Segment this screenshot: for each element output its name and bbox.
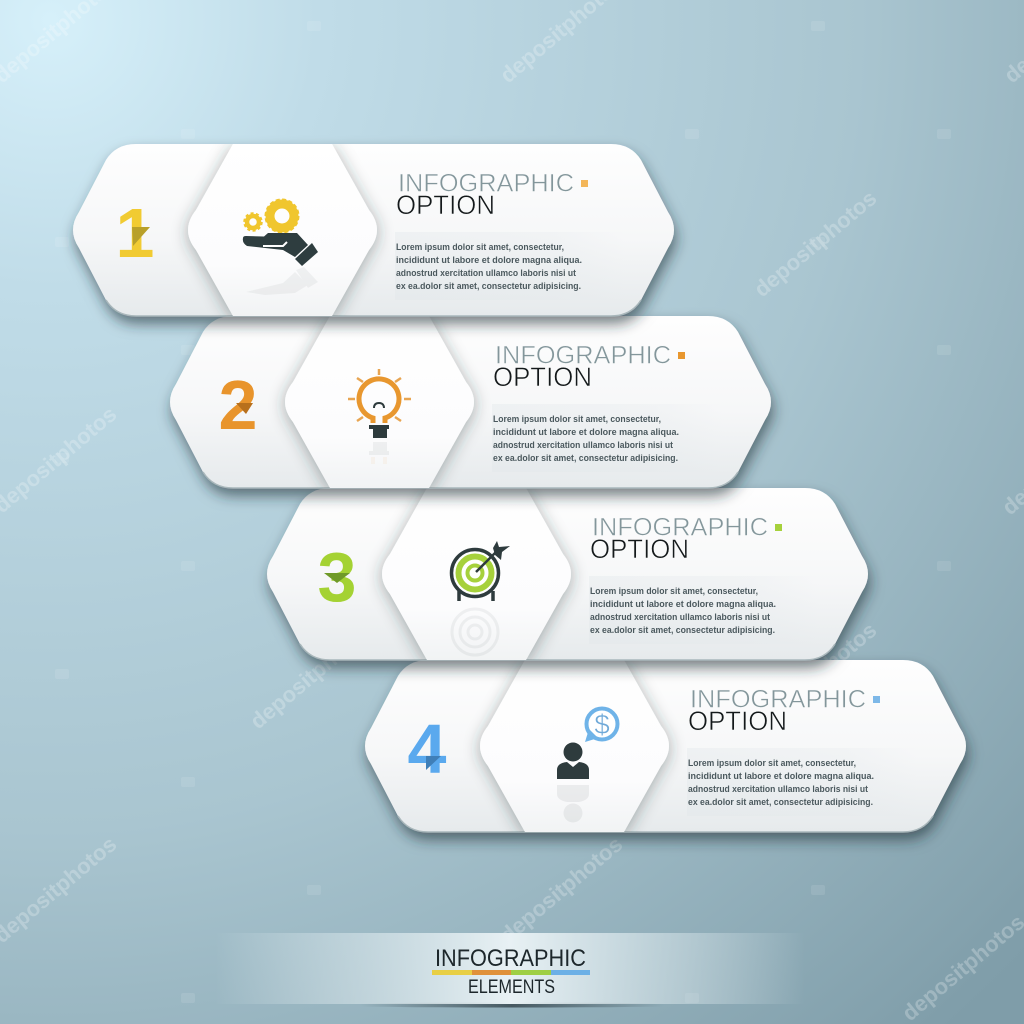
watermarks: depositphotos [749, 617, 881, 734]
marker [581, 180, 588, 187]
text block: adnostrud xercitation ullamco laboris nisi ut [493, 440, 673, 450]
panel: option 4 [365, 660, 966, 832]
text block: incididunt ut labore et dolore magna aliqua. [590, 599, 776, 609]
text block: adnostrud xercitation ullamco laboris nisi ut [590, 612, 770, 622]
colour bar [432, 970, 590, 975]
heading: INFOGRAPHIC [690, 686, 866, 714]
icon: light bulb [348, 369, 411, 464]
text block [688, 758, 874, 807]
icon: person with dollar speech bubble [557, 708, 618, 822]
text block [396, 242, 582, 291]
panel: option 3 [267, 488, 868, 660]
text block: ex ea.dolor sit amet, consectetur adipisicing. [688, 797, 873, 807]
text block: ex ea.dolor sit amet, consectetur adipisicing. [396, 281, 581, 291]
panel: option 3: OPTION [590, 534, 689, 564]
heading: INFOGRAPHIC [495, 342, 671, 370]
text block [590, 586, 776, 635]
text block: Lorem ipsum dolor sit amet, consectetur, [396, 242, 564, 252]
watermarks: depositphotos [495, 831, 627, 948]
watermarks: depositphotos [749, 185, 881, 302]
numeral 3: 3 [318, 538, 356, 616]
icon: hand holding gears [243, 200, 318, 295]
panel: option 2: OPTION [493, 362, 592, 392]
icon: person with dollar speech bubble: $ [594, 709, 610, 740]
text block: Lorem ipsum dolor sit amet, consectetur, [493, 414, 661, 424]
heading: INFOGRAPHIC [592, 514, 768, 542]
text block: adnostrud xercitation ullamco laboris nisi ut [688, 784, 868, 794]
numeral 2: 2 [219, 366, 257, 444]
footer title: INFOGRAPHIC [435, 945, 586, 972]
panel: option 4: OPTION [688, 706, 787, 736]
heading: INFOGRAPHIC [398, 170, 574, 198]
text block: incididunt ut labore et dolore magna aliqua. [493, 427, 679, 437]
text block: ex ea.dolor sit amet, consectetur adipisicing. [590, 625, 775, 635]
text block: Lorem ipsum dolor sit amet, consectetur, [688, 758, 856, 768]
icon: target with arrow [452, 541, 510, 655]
panel: option 1 [73, 144, 674, 316]
text block: incididunt ut labore et dolore magna aliqua. [396, 255, 582, 265]
marker [678, 352, 685, 359]
footer subtitle: ELEMENTS [468, 977, 555, 998]
watermarks: depositphotos [245, 617, 377, 734]
text block: incididunt ut labore et dolore magna aliqua. [688, 771, 874, 781]
panel: option 2 [170, 316, 771, 488]
panel: option 1: OPTION [396, 190, 495, 220]
footer band: infographic elements [215, 933, 805, 1008]
numeral 4: 4 [408, 710, 447, 788]
marker [873, 696, 880, 703]
text block: ex ea.dolor sit amet, consectetur adipisicing. [493, 453, 678, 463]
text block: adnostrud xercitation ullamco laboris nisi ut [396, 268, 576, 278]
numeral 1: 1 [116, 194, 154, 272]
text block [493, 414, 679, 463]
marker [775, 524, 782, 531]
text block: Lorem ipsum dolor sit amet, consectetur, [590, 586, 758, 596]
